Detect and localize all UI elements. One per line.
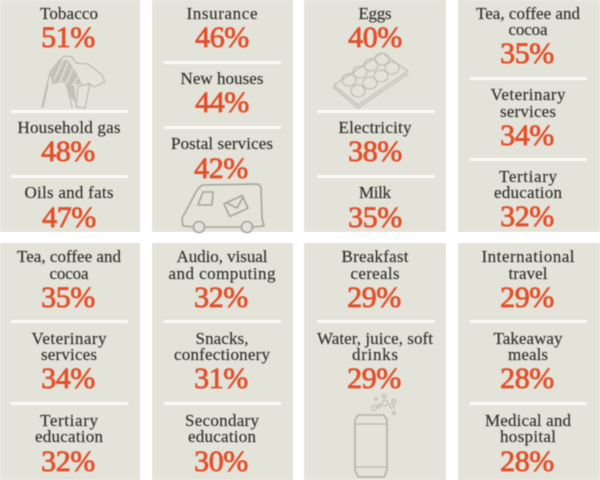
item: Medical and hospital 28% (485, 411, 572, 478)
item: Secondary education 30%: 30% (194, 445, 248, 478)
item: New houses 44%: New houses (180, 69, 264, 88)
item: Milk 35%: 35% (348, 201, 402, 234)
item: Household gas 48%: Household gas (18, 118, 120, 137)
item: Tea, coffee and cocoa 35%: cocoa (50, 264, 89, 283)
icon: delivery van (182, 184, 264, 232)
item: Medical and hospital 28%: 28% (500, 445, 554, 478)
item: Insurance 46%: Insurance (186, 4, 258, 23)
item: International travel 29%: International (482, 247, 575, 266)
item: Audio, visual and computing 32% (168, 247, 276, 314)
panel: top row column 2 (152, 0, 293, 232)
item: Water, juice, soft drinks 29%: 29% (347, 362, 401, 395)
item: Audio, visual and computing 32%: 32% (194, 281, 248, 314)
item: Snacks, confectionery 31%: Snacks, (196, 329, 248, 348)
item: Breakfast cereals 29%: Breakfast (342, 247, 409, 266)
item: Breakfast cereals 29%: cereals (350, 264, 400, 283)
item: International travel 29% (482, 247, 575, 314)
icon: hand holding cigarettes (42, 56, 105, 108)
item: Milk 35%: Milk (359, 183, 392, 202)
item: Electricity 38%: 38% (348, 135, 402, 168)
item: Insurance 46% (186, 4, 258, 54)
item: Veterinary services 34% (490, 85, 566, 152)
item: Postal services 42% (171, 134, 273, 185)
item: International travel 29%: 29% (500, 281, 554, 314)
item: Postal services 42%: Postal services (171, 134, 273, 153)
item: Electricity 38% (338, 118, 412, 168)
item: Tertiary education 32%: education (494, 183, 562, 202)
item: Eggs 40%: 40% (348, 21, 402, 54)
item: Tertiary education 32%: education (35, 427, 104, 446)
panel: top row column 1 (0, 0, 140, 234)
panel: bottom row column 3 (304, 243, 446, 480)
item: Tertiary education 32%: 32% (41, 445, 95, 478)
panel: bottom row column 1 (0, 243, 140, 480)
panel: top row column 3 (304, 0, 446, 234)
item: International travel 29%: travel (508, 264, 548, 283)
item: Water, juice, soft drinks 29%: Water, juice, soft (317, 329, 433, 348)
item: Audio, visual and computing 32%: and computing (168, 264, 276, 283)
item: Tertiary education 32% (494, 167, 562, 233)
item: Electricity 38%: Electricity (338, 118, 412, 137)
panel: top row column 4 (458, 0, 600, 233)
item: New houses 44% (180, 69, 264, 119)
item: Veterinary services 34%: Veterinary (32, 329, 107, 348)
item: Takeaway meals 28%: 28% (500, 362, 554, 395)
item: Tea, coffee and cocoa 35%: 35% (41, 281, 95, 314)
item: Secondary education 30%: education (188, 427, 256, 446)
item: Breakfast cereals 29%: 29% (347, 281, 401, 314)
item: Eggs 40%: Eggs (358, 4, 392, 23)
item: Tertiary education 32%: Tertiary (499, 167, 558, 186)
item: Takeaway meals 28% (494, 329, 563, 395)
item: Tobacco 51%: Tobacco (40, 4, 98, 23)
item: Veterinary services 34%: services (41, 345, 97, 364)
panel: bottom row column 2 (152, 243, 293, 480)
item: Tobacco 51%: 51% (41, 21, 95, 54)
panel: bottom row column 4 (458, 243, 600, 480)
item: Insurance 46%: 46% (195, 21, 249, 54)
item: Snacks, confectionery 31%: 31% (194, 362, 248, 395)
item: Audio, visual and computing 32%: Audio, visual (176, 247, 268, 266)
item: Takeaway meals 28%: Takeaway (494, 329, 563, 348)
item: Takeaway meals 28%: meals (508, 345, 548, 364)
item: Household gas 48% (18, 118, 120, 168)
item: Medical and hospital 28%: Medical and (485, 411, 572, 430)
item: Tertiary education 32%: 32% (500, 200, 554, 233)
item: Tea, coffee and cocoa 35%: 35% (500, 37, 554, 70)
item: Breakfast cereals 29% (342, 247, 409, 314)
item: Eggs 40% (348, 4, 402, 54)
item: Tertiary education 32% (35, 411, 104, 478)
item: Water, juice, soft drinks 29%: drinks (352, 345, 398, 364)
item: Snacks, confectionery 31%: confectionery (174, 345, 270, 364)
item: Oils and fats 47%: 47% (42, 201, 96, 234)
item: Secondary education 30% (185, 411, 260, 478)
item: Veterinary services 34% (32, 329, 107, 395)
item: Tertiary education 32%: Tertiary (40, 411, 98, 430)
item: Tea, coffee and cocoa 35% (476, 4, 580, 70)
item: Water, juice, soft drinks 29% (317, 329, 433, 395)
icon: fizzy drink can (355, 394, 396, 477)
item: Tea, coffee and cocoa 35%: Tea, coffee and (17, 247, 122, 266)
item: Postal services 42%: 42% (194, 152, 248, 185)
item: Snacks, confectionery 31% (174, 329, 270, 395)
item: Veterinary services 34%: 34% (41, 362, 95, 395)
item: Medical and hospital 28%: hospital (500, 427, 556, 446)
item: Household gas 48%: 48% (41, 135, 95, 168)
item: Veterinary services 34%: services (500, 102, 556, 121)
item: Tea, coffee and cocoa 35%: Tea, coffee and (476, 4, 580, 23)
item: Secondary education 30%: Secondary (185, 411, 260, 430)
item: Tobacco 51% (40, 4, 98, 54)
icon: egg carton (333, 53, 408, 108)
item: Veterinary services 34%: 34% (500, 119, 554, 152)
item: Oils and fats 47%: Oils and fats (24, 183, 114, 202)
item: Milk 35% (348, 183, 402, 234)
item: Oils and fats 47% (24, 183, 114, 234)
item: Tea, coffee and cocoa 35% (17, 247, 122, 314)
item: New houses 44%: 44% (195, 86, 249, 119)
item: Tea, coffee and cocoa 35%: cocoa (508, 20, 548, 39)
item: Veterinary services 34%: Veterinary (490, 85, 566, 104)
